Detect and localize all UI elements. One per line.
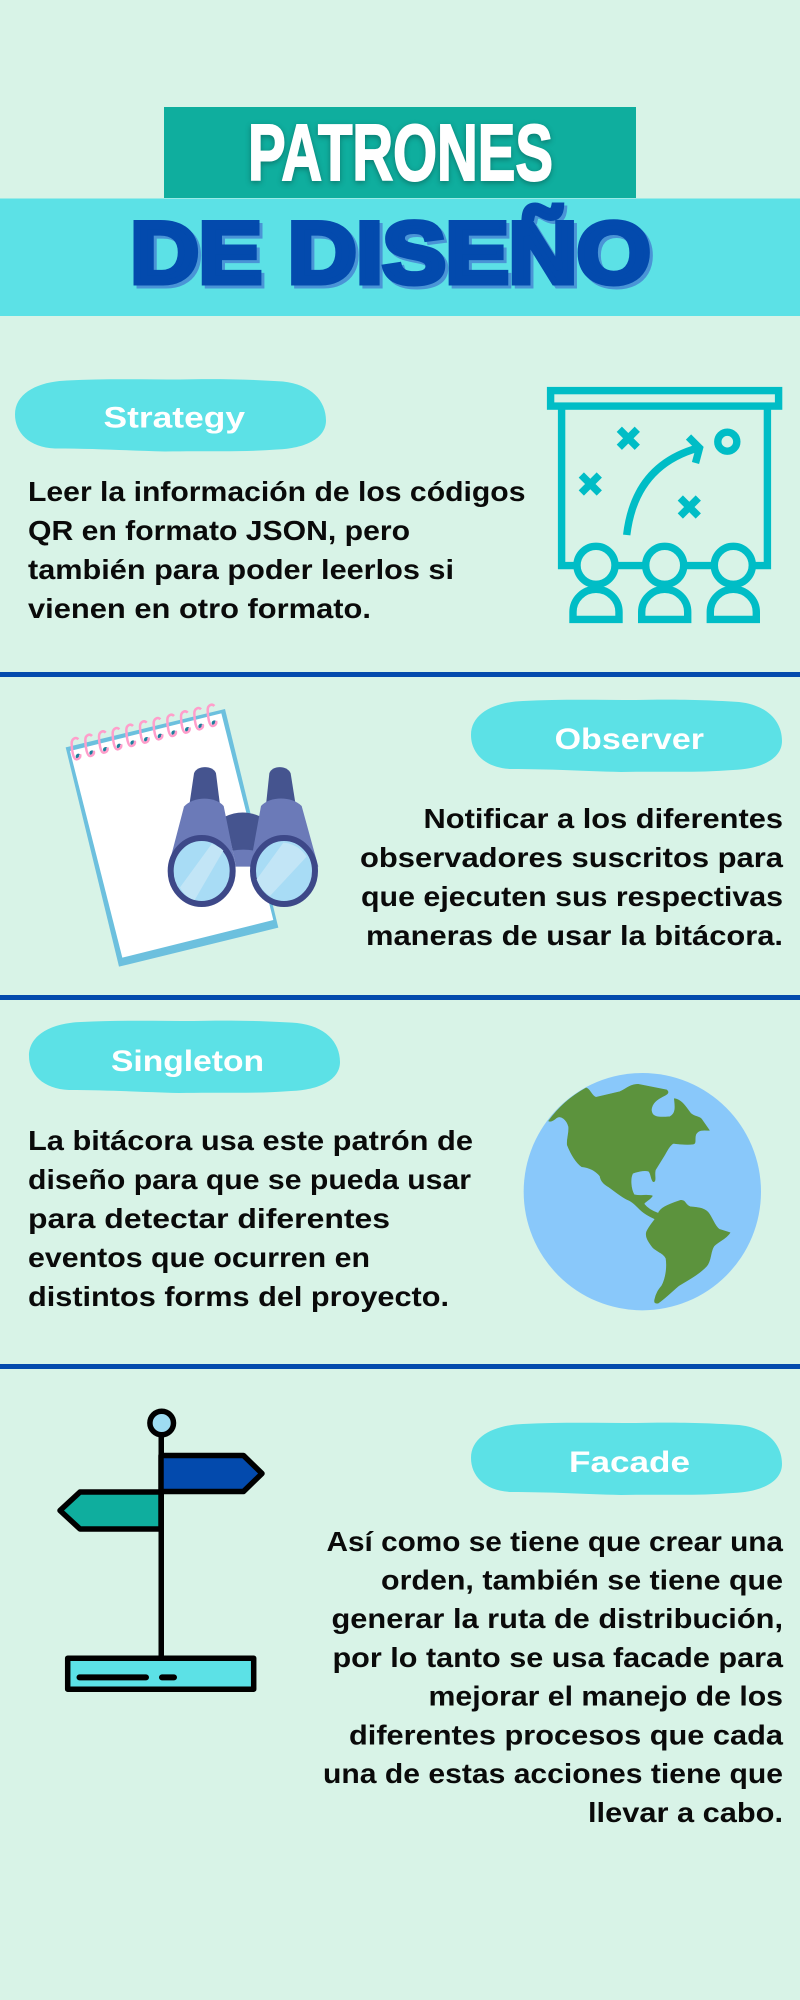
pill: Strategy	[15, 379, 326, 452]
text: Facade description	[323, 1526, 783, 1828]
text: Facade description: llevar a cabo.	[588, 1797, 783, 1828]
signpost base	[68, 1658, 254, 1689]
pill: Strategy: Strategy	[104, 402, 245, 434]
text: Facade description: Así como se tiene que crear una	[326, 1526, 783, 1557]
text: Singleton description: distintos forms del proyecto.	[28, 1281, 449, 1312]
text: Observer description	[360, 803, 783, 951]
text: Facade description: diferentes procesos que cada	[349, 1720, 783, 1750]
pill: Observer	[471, 700, 782, 772]
base marks	[80, 1674, 174, 1680]
text: Facade description: generar la ruta de distribución,	[332, 1603, 783, 1634]
icon: notebook and binoculars	[66, 705, 318, 967]
text: Facade description: orden, también se tiene que	[381, 1564, 783, 1596]
sign: right arrow	[161, 1456, 262, 1492]
text: Strategy description: vienen en otro formato.	[28, 593, 371, 624]
title band: cyan	[0, 198, 800, 316]
title band: teal	[164, 107, 636, 198]
text: Facade description: por lo tanto se usa facade para	[332, 1642, 783, 1673]
text: Singleton description	[28, 1125, 473, 1312]
text: Strategy description	[28, 476, 526, 624]
panel: Observer	[66, 700, 783, 967]
text: Strategy description: QR en formato JSON, pero	[28, 515, 410, 546]
text: Singleton description: diseño para que se pueda usar	[28, 1164, 471, 1195]
signpost top circle	[150, 1411, 174, 1435]
text: Strategy description: Leer la información de los códigos	[28, 476, 526, 507]
text: Facade description: mejorar el manejo de los	[428, 1680, 783, 1712]
icon: strategy board with audience	[551, 391, 779, 619]
text: Facade description: una de estas acciones tiene que	[323, 1758, 783, 1789]
pill: Singleton	[29, 1021, 340, 1093]
divider	[0, 1364, 800, 1369]
panel: Facade	[60, 1411, 783, 1828]
divider	[0, 672, 800, 677]
text: Singleton description: La bitácora usa este patrón de	[28, 1125, 473, 1156]
title block	[0, 107, 800, 316]
sign: left arrow	[60, 1492, 161, 1529]
icon: globe	[524, 1073, 761, 1310]
signpost pole	[158, 1436, 164, 1658]
pill: Observer: Observer	[555, 723, 704, 756]
text: Singleton description: para detectar diferentes	[28, 1203, 390, 1234]
pill: Facade: Facade	[569, 1446, 690, 1479]
icon: binoculars	[168, 767, 318, 904]
divider	[0, 995, 800, 1000]
title: DE DISEÑO: DE DISEÑO	[130, 206, 650, 302]
text: Strategy description: también para poder leerlos si	[28, 554, 454, 585]
text: Observer description: que ejecuten sus respectivas	[361, 881, 783, 912]
panel: Singleton	[28, 1021, 761, 1312]
text: Observer description: Notificar a los diferentes	[424, 803, 783, 834]
icon: notebook	[66, 705, 278, 967]
title shadow: DE DISEÑO: DE DISEÑO	[134, 208, 654, 304]
pill: Facade	[471, 1423, 782, 1495]
icon: signpost	[60, 1411, 262, 1689]
text: Observer description: observadores suscritos para	[360, 842, 783, 873]
text: Singleton description: eventos que ocurren en	[28, 1242, 370, 1273]
panel: Strategy	[15, 379, 779, 624]
text: Observer description: maneras de usar la bitácora.	[366, 920, 783, 951]
pill: Singleton: Singleton	[111, 1045, 264, 1078]
title: PATRONES: PATRONES	[248, 108, 553, 197]
